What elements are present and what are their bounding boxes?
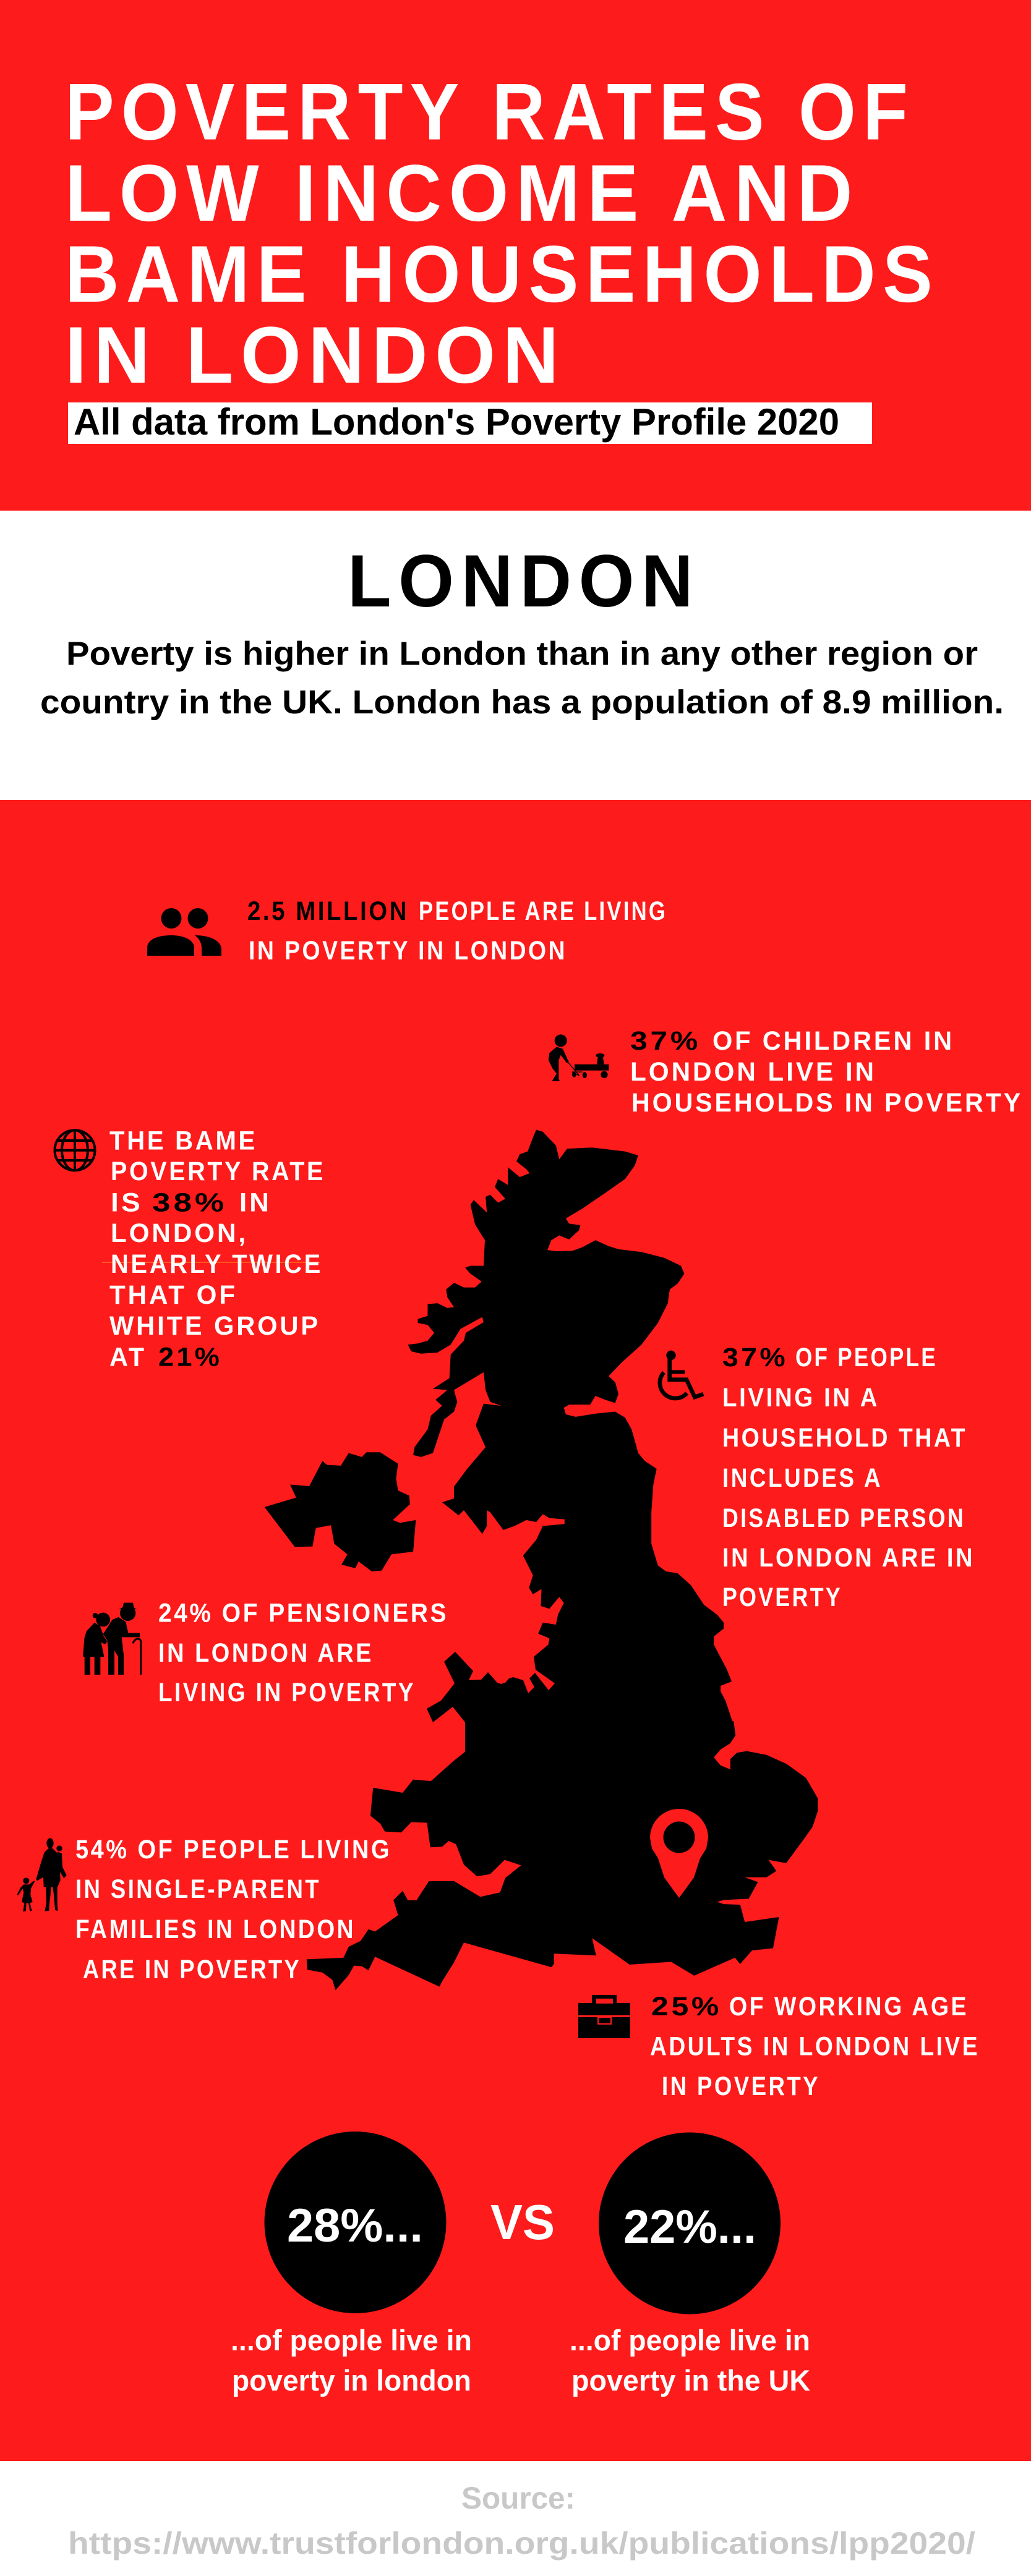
stat: single-parent families: FAMILIES IN LONDON: [75, 1915, 356, 1944]
icon: parent pulling wagon: [549, 1034, 609, 1081]
source text: https://www.trustforlondon.org.uk/publications/lpp2020/: [68, 2526, 975, 2561]
caption: London: ...of people live in: [231, 2324, 472, 2357]
panel: London intro: [0, 511, 1031, 800]
stat: BAME poverty rate: 21%: [158, 1343, 222, 1372]
icon: briefcase: [578, 1995, 630, 2038]
stat: disabled households: DISABLED PERSON: [722, 1503, 965, 1533]
stat: BAME poverty rate: LONDON,: [111, 1218, 248, 1248]
stat: 2.5 million people: IN POVERTY IN LONDON: [249, 936, 567, 966]
stat: 2.5 million people: 2.5 MILLION: [247, 896, 409, 926]
caption: London: poverty in london: [232, 2364, 471, 2397]
stat: working age adults: OF WORKING AGE: [729, 1992, 969, 2021]
stat: disabled households: HOUSEHOLD THAT: [722, 1423, 967, 1453]
stat: disabled households: LIVING IN A: [722, 1383, 879, 1413]
source text: Source:: [461, 2481, 575, 2515]
map: Great Britain: [307, 1130, 818, 1990]
intro text: country in the UK. London has a population of 8.9 million.: [40, 684, 1004, 721]
caption: UK: [570, 2324, 810, 2397]
stat: single-parent families: IN SINGLE-PARENT: [75, 1874, 321, 1904]
stat: BAME poverty rate: THAT OF: [109, 1280, 237, 1310]
icon: globe: [54, 1130, 95, 1170]
comparison: London 28 percent: [231, 2132, 472, 2397]
circle: 22%: 22%...: [623, 2201, 756, 2253]
stat: pensioners: 24% OF PENSIONERS: [158, 1599, 448, 1628]
stat: BAME poverty rate: IS: [111, 1188, 143, 1218]
icon: London location pin: [650, 1809, 708, 1898]
stat: single-parent families: ARE IN POVERTY: [83, 1955, 301, 1984]
stat: pensioners: LIVING IN POVERTY: [158, 1678, 416, 1707]
map: Ireland: [265, 1452, 416, 1571]
stat: disabled households: 37%: [722, 1343, 788, 1372]
title: IN LONDON: [65, 310, 566, 400]
icon: people: [147, 908, 221, 956]
circle: 28%: [265, 2132, 447, 2313]
stat: children in poverty: 37%: [630, 1026, 701, 1056]
icon: wheelchair: [660, 1351, 703, 1398]
stat: children in poverty: [549, 1026, 1023, 1118]
title: LOW INCOME AND: [65, 148, 860, 238]
stat: working age adults: [578, 1992, 980, 2101]
panel: title header: [0, 0, 1031, 511]
map of UK and Ireland: [265, 1130, 818, 1990]
caption: UK: poverty in the UK: [571, 2364, 810, 2397]
stat: BAME poverty rate: IN: [239, 1188, 272, 1218]
title: BAME HOUSEHOLDS: [65, 229, 939, 319]
stat: working age adults: 25%: [651, 1992, 722, 2021]
stat: disabled households: IN LONDON ARE IN: [722, 1543, 975, 1573]
stat: BAME poverty rate: THE BAME: [109, 1126, 257, 1156]
stat: BAME poverty rate: POVERTY RATE: [111, 1157, 325, 1186]
stat: children in poverty: LONDON LIVE IN: [630, 1057, 876, 1087]
stat: BAME poverty rate: 38%: [152, 1188, 227, 1218]
intro text: [40, 635, 1004, 721]
label: VS: VS: [490, 2195, 555, 2250]
stat: pensioners: [83, 1599, 448, 1707]
stat: BAME poverty rate: WHITE GROUP: [109, 1311, 320, 1341]
comparison: UK 22 percent: [570, 2133, 810, 2397]
stat: BAME poverty rate: AT: [109, 1343, 147, 1372]
source text: [68, 2481, 975, 2561]
stat: 2.5 million people: [147, 896, 667, 966]
stat: children in poverty: HOUSEHOLDS IN POVERTY: [631, 1088, 1023, 1118]
title: POVERTY RATES OF: [65, 67, 915, 157]
stat: working age adults: ADULTS IN LONDON LIVE: [650, 2031, 980, 2061]
intro text: Poverty is higher in London than in any other region or: [66, 635, 978, 673]
stat: BAME poverty rate: NEARLY TWICE: [111, 1249, 323, 1279]
panel: source footer: [0, 2461, 1031, 2576]
caption: UK: ...of people live in: [570, 2324, 810, 2357]
title: [65, 67, 939, 400]
stat: disabled households: OF PEOPLE: [795, 1343, 938, 1372]
stat: children in poverty: OF CHILDREN IN: [712, 1026, 954, 1056]
stat: pensioners: IN LONDON ARE: [158, 1638, 374, 1668]
stat: disabled households: [660, 1343, 975, 1612]
circle: 28%: 28%...: [287, 2200, 423, 2252]
heading: London: LONDON: [348, 540, 700, 623]
stat: working age adults: IN POVERTY: [662, 2072, 820, 2101]
subtitle box: All data from London's Poverty Profile 2020: [74, 401, 839, 443]
icon: elderly couple: [83, 1603, 141, 1675]
stat: disabled households: INCLUDES A: [722, 1463, 883, 1493]
stat: disabled households: POVERTY: [722, 1583, 842, 1612]
caption: London: [231, 2324, 472, 2397]
stat: BAME poverty rate: [54, 1126, 325, 1372]
stat: single-parent families: 54% OF PEOPLE LIVING: [75, 1835, 391, 1864]
circle: 22%: [599, 2133, 781, 2315]
icon: parent and children: [17, 1838, 67, 1911]
stat: single-parent families: [17, 1835, 391, 1984]
stat: 2.5 million people: PEOPLE ARE LIVING: [419, 896, 667, 926]
